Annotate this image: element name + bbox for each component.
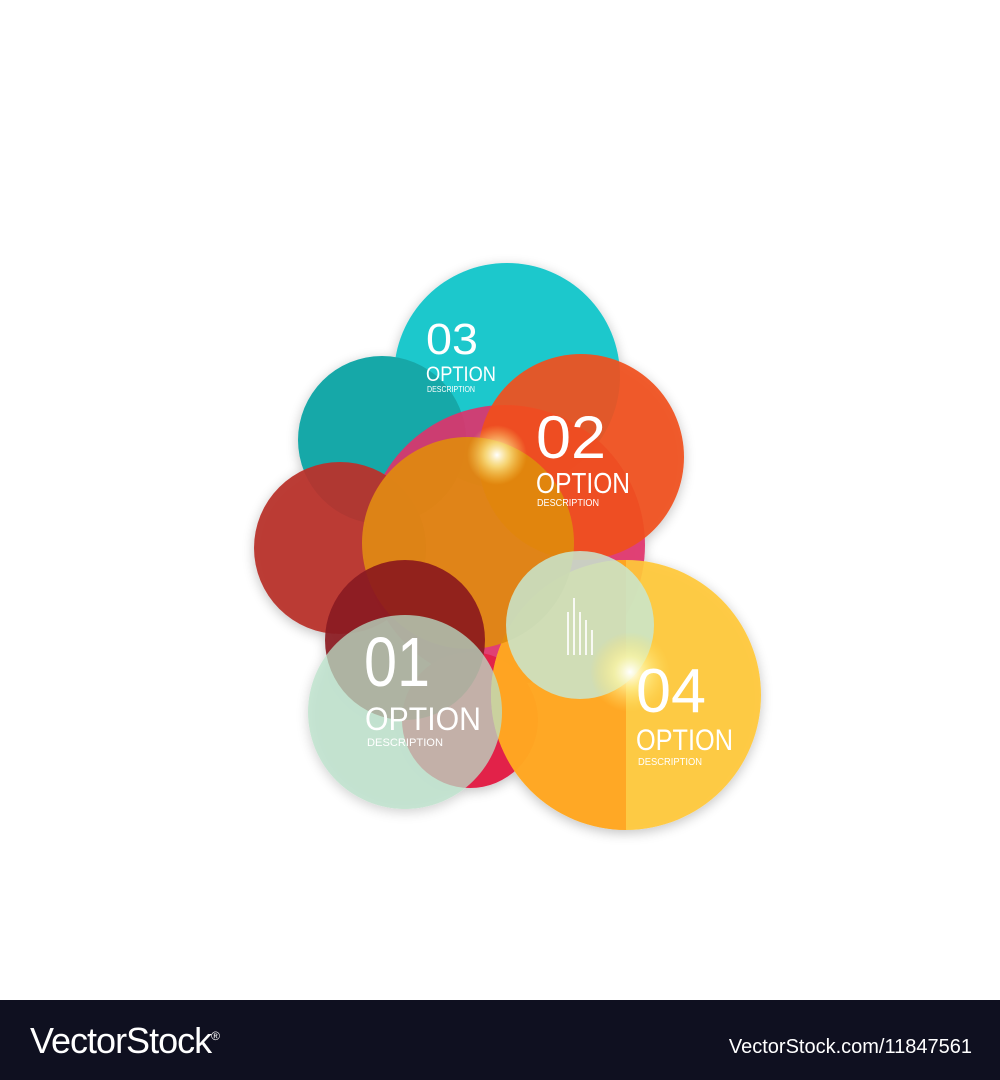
circle: dark red left <box>254 462 426 634</box>
circle: pale green glass <box>506 551 654 699</box>
icon: bar chart <box>568 598 592 655</box>
circle: red bottom <box>402 652 538 788</box>
label 03: 03 <box>426 315 478 364</box>
circle: teal 03 <box>394 263 620 489</box>
label 03 <box>426 315 496 394</box>
light flares <box>467 425 527 485</box>
label 02: 02 <box>536 404 606 471</box>
circle: light green 01 <box>308 615 502 809</box>
footer url: VectorStock.com/11847561 <box>729 1036 972 1058</box>
label 04: DESCRIPTION <box>638 757 702 768</box>
circle: magenta back <box>365 405 645 685</box>
footer bar <box>0 1000 1000 1080</box>
circle group <box>254 263 761 830</box>
circle: yellow 04 <box>491 560 761 830</box>
label 02 <box>536 404 630 509</box>
footer logo: VectorStock® <box>30 1020 219 1061</box>
circle: maroon 01 <box>325 560 485 720</box>
circle: orange center <box>362 437 574 649</box>
label 04 <box>636 657 733 768</box>
label 02: DESCRIPTION <box>537 498 599 509</box>
label 01 <box>364 623 481 749</box>
label 01: OPTION <box>365 701 481 737</box>
circle: red 02 <box>478 354 684 560</box>
label 04: 04 <box>636 657 706 726</box>
label 01: DESCRIPTION <box>367 737 443 749</box>
label 02: OPTION <box>536 468 630 500</box>
circle: dark teal <box>298 356 466 524</box>
label 01: 01 <box>364 623 430 701</box>
label 04: OPTION <box>636 724 733 757</box>
label 03: DESCRIPTION <box>427 385 475 394</box>
label 03: OPTION <box>426 363 496 386</box>
